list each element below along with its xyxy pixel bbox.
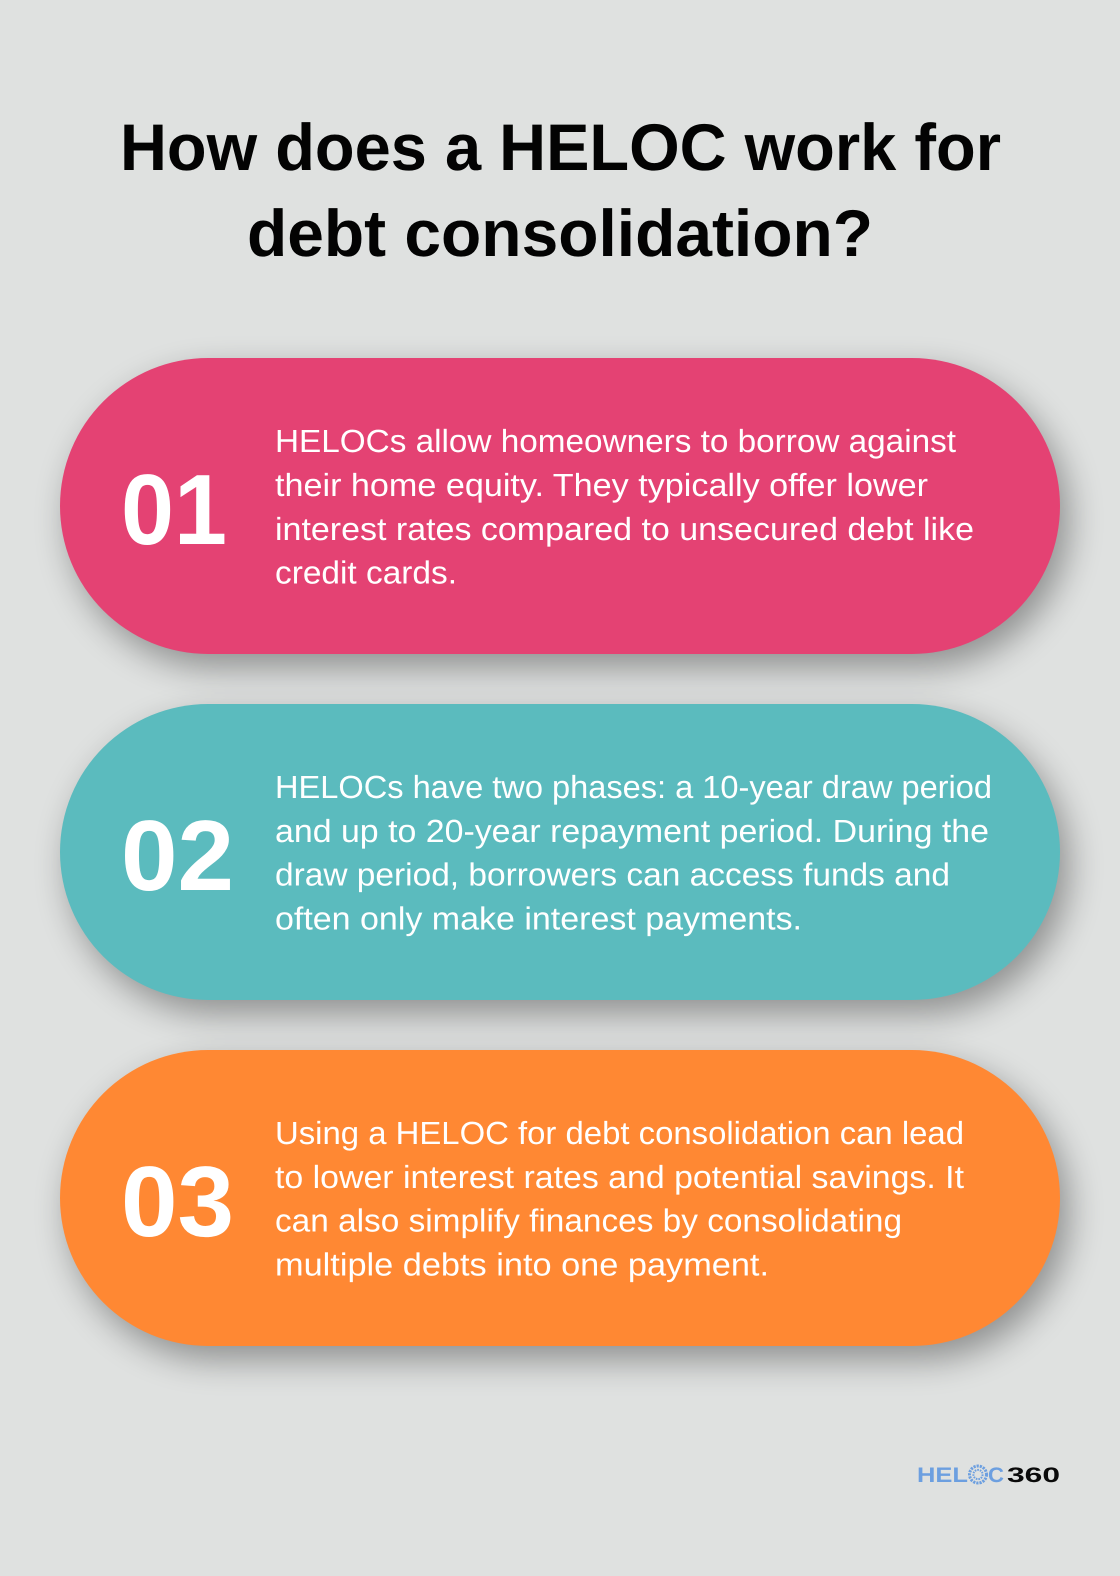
logo: HELOC360 xyxy=(917,1464,1060,1487)
text block: step 02: draw period, borrowers can access funds and xyxy=(275,856,950,892)
logo: HELOC360: HEL xyxy=(917,1464,968,1487)
panel: step 01 xyxy=(60,358,1060,654)
text block: step 01 xyxy=(275,423,974,590)
text block: step 01: their home equity. They typically offer lower xyxy=(275,467,928,503)
title: How does a HELOC work for xyxy=(120,110,1001,184)
text block: step 01: HELOCs allow homeowners to borrow against xyxy=(275,423,956,459)
title: debt consolidation? xyxy=(247,196,873,270)
number 02: 02 xyxy=(121,800,234,912)
panel: step 02 xyxy=(60,704,1060,1000)
text block: step 03: multiple debts into one payment. xyxy=(275,1246,769,1282)
text block: step 02: often only make interest payments. xyxy=(275,900,802,936)
text block: step 02: HELOCs have two phases: a 10-year draw period xyxy=(275,769,992,805)
text block: step 03 xyxy=(275,1115,964,1282)
panel: step 03 xyxy=(60,1050,1060,1346)
icon: swirl letter O xyxy=(970,1466,986,1483)
text block: step 01: credit cards. xyxy=(275,554,457,590)
logo: HELOC360: C xyxy=(988,1464,1004,1487)
teal pill background xyxy=(60,704,1060,1000)
text block: step 03: Using a HELOC for debt consolidation can lead xyxy=(275,1115,964,1151)
pink pill background xyxy=(60,358,1060,654)
title xyxy=(120,110,1001,270)
text block: step 03: can also simplify finances by consolidating xyxy=(275,1202,902,1238)
number 01: 01 xyxy=(121,454,227,566)
logo: HELOC360: 360 xyxy=(1007,1464,1060,1487)
text block: step 02: and up to 20-year repayment period. During the xyxy=(275,813,989,849)
number 03: 03 xyxy=(121,1146,234,1258)
text block: step 03: to lower interest rates and potential savings. It xyxy=(275,1159,964,1195)
text block: step 01: interest rates compared to unsecured debt like xyxy=(275,511,974,547)
text block: step 02 xyxy=(275,769,992,936)
orange pill background xyxy=(60,1050,1060,1346)
